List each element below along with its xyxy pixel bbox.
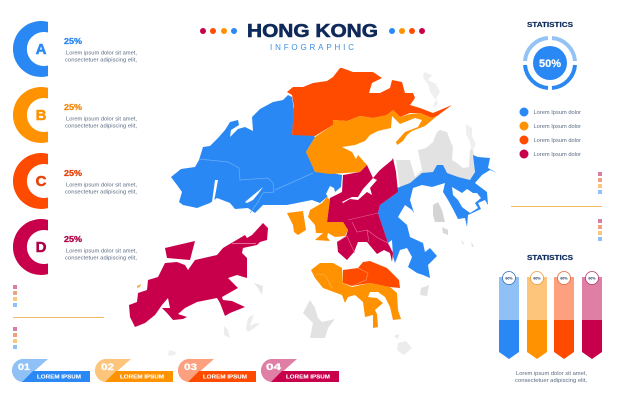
- panel: item D: consectetuer adipiscing elit,: [65, 256, 137, 262]
- panel: item A: Lorem ipsum dolor sit amet,: [66, 50, 137, 56]
- statistics caption: [515, 371, 587, 384]
- panel: item C: 25%: [64, 168, 82, 178]
- map: red north: [287, 68, 452, 136]
- tag 03: [178, 359, 256, 382]
- decorative squares right: [511, 172, 602, 241]
- map: orange north: [306, 110, 437, 174]
- legend: Lorem Ipsum dolor: [534, 124, 581, 130]
- donut chart 50%: [525, 38, 575, 88]
- title: INFOGRAPHIC: [270, 43, 354, 52]
- tag 02: [95, 359, 173, 382]
- legend: [520, 108, 581, 158]
- panel: item A: consectetuer adipiscing elit,: [65, 58, 137, 64]
- panel: item D: 25%: [64, 234, 82, 244]
- bar 1: 60%: [505, 276, 513, 280]
- legend: Lorem Ipsum dolor: [534, 110, 581, 116]
- map: orange south: [311, 263, 401, 328]
- tag 04: [261, 359, 339, 382]
- panel: item B: consectetuer adipiscing elit,: [65, 124, 137, 130]
- tag 04: LOREM IPSUM: [286, 374, 330, 380]
- panel: item D: D: [36, 239, 47, 256]
- map: crimson Lantau: [129, 223, 268, 327]
- statistics caption: Lorem ipsum dolor sit amet,: [516, 371, 587, 377]
- panel: item B: Lorem ipsum dolor sit amet,: [66, 116, 137, 122]
- tag 03: LOREM IPSUM: [203, 374, 247, 380]
- panel: item B: 25%: [64, 102, 82, 112]
- map: blue west: [171, 95, 342, 213]
- panel: item D: Lorem ipsum dolor sit amet,: [66, 248, 137, 254]
- tag 03: 03: [184, 362, 197, 373]
- statistics caption: consectetuer adipiscing elit,: [515, 378, 587, 384]
- panel: item C: C: [36, 173, 47, 190]
- tag 02: LOREM IPSUM: [120, 374, 164, 380]
- tag 04: 04: [266, 362, 282, 373]
- bar 2: 60%: [533, 276, 541, 280]
- map: Hong Kong: [129, 68, 497, 356]
- panel: item B: [13, 87, 137, 143]
- statistics heading top: STATISTICS: [527, 20, 573, 29]
- donut chart 50%: 50%: [539, 58, 561, 70]
- tag 02: 02: [101, 362, 114, 373]
- panel: item A: [13, 21, 137, 77]
- legend: Lorem Ipsum dolor: [534, 152, 581, 158]
- tag 01: [12, 359, 90, 382]
- title: HONG KONG: [247, 21, 378, 41]
- panel: item C: [13, 153, 137, 209]
- panel: item B: B: [36, 107, 47, 124]
- map: orange central: [287, 197, 348, 241]
- bar chart: [499, 272, 602, 359]
- map: grey islands: [168, 72, 476, 356]
- panel: item C: Lorem ipsum dolor sit amet,: [66, 182, 137, 188]
- legend: Lorem Ipsum dolor: [534, 138, 581, 144]
- panel: item C: consectetuer adipiscing elit,: [65, 190, 137, 196]
- statistics heading bottom: STATISTICS: [527, 253, 573, 262]
- tag 01: LOREM IPSUM: [37, 374, 81, 380]
- tag 01: 01: [18, 362, 31, 373]
- bar 3: 60%: [560, 276, 568, 280]
- panel: item A: A: [36, 41, 47, 58]
- map: red south: [343, 261, 400, 288]
- decorative squares left: [13, 285, 104, 349]
- panel: item A: 25%: [64, 36, 82, 46]
- map: crimson centre: [327, 158, 398, 262]
- panel: item D: [13, 219, 137, 275]
- title: [200, 21, 425, 52]
- bar 4: 60%: [588, 276, 596, 280]
- map: blue east: [378, 155, 497, 278]
